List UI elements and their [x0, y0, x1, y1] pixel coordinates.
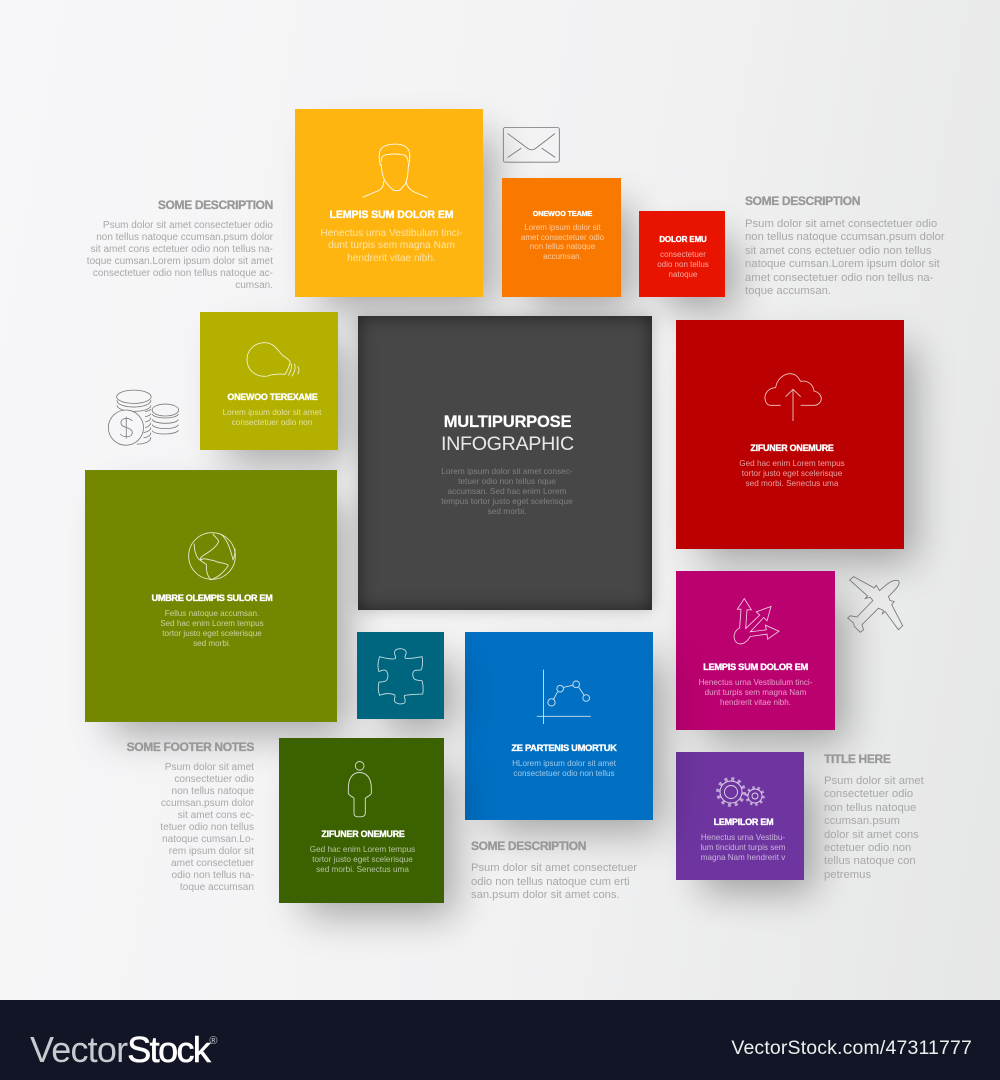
text block: Lorem ipsum dolor sit amet [223, 408, 321, 417]
panel: dark green zifuner [279, 738, 444, 903]
panel: dark red zifuner [676, 320, 904, 549]
text block: lum tincidunt turpis sem [700, 843, 786, 852]
text block [699, 678, 812, 707]
text block: HLorem ipsum dolor sit amet [512, 759, 616, 768]
text block: Psum dolor sit amet consectetuer odio [745, 218, 937, 230]
side note: top left description [86, 198, 273, 291]
text block: Sed hac enim Lorem tempus [160, 619, 264, 628]
heading: ONEWOO TEREXAME [227, 392, 318, 402]
text block: petremus [824, 869, 871, 881]
text block: dolor sit amet cons [824, 829, 919, 841]
text block: tempus tortor justo eget scelerisque [441, 496, 573, 506]
text block: sed morbi. [488, 506, 526, 516]
text block: sit amet cons ectetuer odio non tellus na- [91, 244, 273, 255]
text block: dunt turpis sem magna Nam [705, 688, 806, 697]
text block [700, 833, 786, 862]
text block: Fellus natoque accumsan. [165, 609, 259, 618]
text block: tortor justo eget scelerisque [742, 469, 842, 478]
logo wordmark: VectorStock® [30, 1029, 217, 1070]
icon: globe [188, 532, 236, 580]
panel: center dark title [358, 316, 652, 610]
text block [471, 862, 637, 901]
text block: amet consectetuer odio [521, 233, 604, 242]
text block: consectetuer odio non tellus natoque ac- [93, 268, 273, 279]
text block [521, 223, 604, 261]
text block: Henectus urna Vestibu- [701, 833, 785, 842]
text block: accumsan. Sed hac enim Lorem [448, 486, 566, 496]
heading: ZIFUNER ONEMURE [750, 443, 834, 453]
heading: LEMPIS SUM DOLOR EM [703, 662, 808, 672]
text block: Psum dolor sit amet [824, 775, 924, 787]
heading: LEMPIS SUM DOLOR EM [329, 209, 454, 221]
text block: odio non tellus natoque cum erti [471, 876, 630, 888]
panel: blue ze partenis [465, 632, 653, 820]
text block: toque accumsan. [745, 285, 831, 297]
icon: head [362, 144, 428, 198]
icon: puzzle piece [378, 648, 424, 704]
heading: ZE PARTENIS UMORTUK [511, 743, 617, 753]
text block [160, 762, 254, 893]
text block [321, 228, 462, 264]
text block: tortor justo eget scelerisque [312, 855, 413, 864]
text block: odio non tellus na- [172, 870, 254, 881]
text block: cumsan. [235, 280, 273, 291]
panel: teal puzzle [357, 632, 444, 719]
text block: sit amet cons ectetuer odio non tellus [745, 245, 932, 257]
text block [441, 466, 573, 516]
text block: amet consectetuer odio non tellus na- [745, 272, 933, 284]
side note: top right description [745, 194, 945, 297]
text block: consectetuer [660, 250, 706, 259]
heading: ONEWOO TEAME [533, 209, 592, 218]
text block: Lorem ipsum dolor sit amet consec- [441, 466, 573, 476]
text block: tellus natoque con [824, 855, 916, 867]
text block: accumsan. [543, 252, 582, 261]
text block: consectetuer odio non [232, 418, 312, 427]
text block [160, 609, 264, 648]
icon: arrows [734, 598, 780, 644]
side note: title here [824, 752, 924, 881]
text block: Psum dolor sit amet [165, 762, 254, 773]
text block: ccumsan.psum dolor [161, 798, 254, 809]
text block: Ged hac enim Lorem tempus [739, 459, 845, 468]
icon: cloud upload [764, 373, 822, 421]
heading: SOME DESCRIPTION [471, 839, 586, 853]
text block [223, 408, 322, 427]
text block: amet consectetuer [171, 858, 254, 869]
heading: DOLOR EMU [659, 235, 707, 244]
subtitle: infographic: INFOGRAPHIC [441, 433, 574, 455]
text block: sit amet cons ec- [178, 810, 254, 821]
text block: san.psum dolor sit amet cons. [471, 889, 620, 901]
text block: tetuer odio non tellus nque [458, 476, 556, 486]
text block: dunt turpis sem magna Nam [328, 240, 455, 251]
text block: tortor justo eget scelerisque [162, 629, 262, 638]
text block: odio non tellus [657, 260, 709, 269]
footer bar [0, 1000, 1000, 1080]
text block: consectetuer odio [824, 788, 913, 800]
heading: SOME FOOTER NOTES [127, 740, 254, 754]
icon: gears [716, 777, 765, 807]
text block: ectetuer odio non [824, 842, 911, 854]
panel: magenta lempis sum [676, 571, 835, 730]
text block: tetuer odio non tellus [160, 822, 254, 833]
icon: airplane [847, 576, 904, 633]
icon: coins [108, 390, 180, 446]
text block: consectetuer odio [174, 774, 254, 785]
text block [745, 218, 945, 297]
text block: Henectus urna Vestibulum tinci- [699, 678, 812, 687]
text block: ccumsan.psum [824, 815, 900, 827]
heading: ZIFUNER ONEMURE [321, 829, 405, 839]
text block: toque accumsan [180, 882, 254, 893]
panel: olive onewoo terexame [200, 312, 338, 450]
panel: red dolor emu [639, 211, 725, 297]
text block: non tellus natoque [172, 786, 254, 797]
text block: non tellus natoque [824, 802, 916, 814]
icon: line chart [536, 670, 591, 724]
image id: VectorStock.com/47311777 [731, 1037, 972, 1059]
text block: Ged hac enim Lorem tempus [310, 845, 415, 854]
text block: rem ipsum dolor sit [169, 846, 254, 857]
text block: sed morbi. Senectus uma [746, 479, 838, 488]
heading: LEMPILOR EM [714, 817, 773, 827]
heading: TITLE HERE [824, 752, 891, 766]
heading: SOME DESCRIPTION [745, 194, 860, 208]
title: multipurpose: MULTIPURPOSE [444, 412, 571, 431]
text block [739, 459, 845, 488]
side note: footer notes [126, 740, 254, 893]
icon: person [348, 761, 372, 818]
text block [512, 759, 616, 778]
text block: natoque cumsan.Lorem ipsum dolor sit [745, 258, 940, 270]
text block: natoque cumsan.Lo- [162, 834, 254, 845]
text block [657, 250, 709, 279]
text block [824, 775, 924, 881]
text block: hendrerit vitae nibh. [347, 253, 436, 264]
text block: Psum dolor sit amet consectetuer odio [103, 220, 273, 231]
text block: non tellus natoque ccumsan.psum dolor [96, 232, 273, 243]
text block [310, 845, 415, 874]
text block: hendrerit vitae nibh. [720, 698, 791, 707]
panel: yellow lempis sum [295, 109, 483, 297]
text block: non tellus natoque ccumsan.psum dolor [745, 231, 945, 243]
text block [86, 220, 273, 291]
text block: sed morbi. Senectus uma [316, 865, 409, 874]
text block: natoque [669, 270, 697, 279]
side note: bottom description [471, 839, 637, 901]
text block: consectetuer odio non tellus [513, 769, 615, 778]
panel: orange onewoo teame [502, 178, 621, 297]
text block: toque cumsan.Lorem ipsum dolor sit amet [87, 256, 273, 267]
text block: non tellus natoque [530, 242, 595, 251]
text block: Lorem ipsum dolor sit [524, 223, 601, 232]
text block: magna Nam hendrerit v [701, 853, 785, 862]
icon: envelope [502, 127, 560, 163]
icon: light bulb [246, 342, 300, 377]
text block: sed morbi. [193, 639, 231, 648]
panel: green umbre olempis [85, 470, 337, 722]
panel: purple lempilor [676, 752, 804, 880]
text block: Henectus urna Vestibulum tinci- [321, 228, 462, 239]
heading: UMBRE OLEMPIS SULOR EM [152, 593, 272, 603]
heading: SOME DESCRIPTION [158, 198, 273, 212]
text block: Psum dolor sit amet consectetuer [471, 862, 637, 874]
